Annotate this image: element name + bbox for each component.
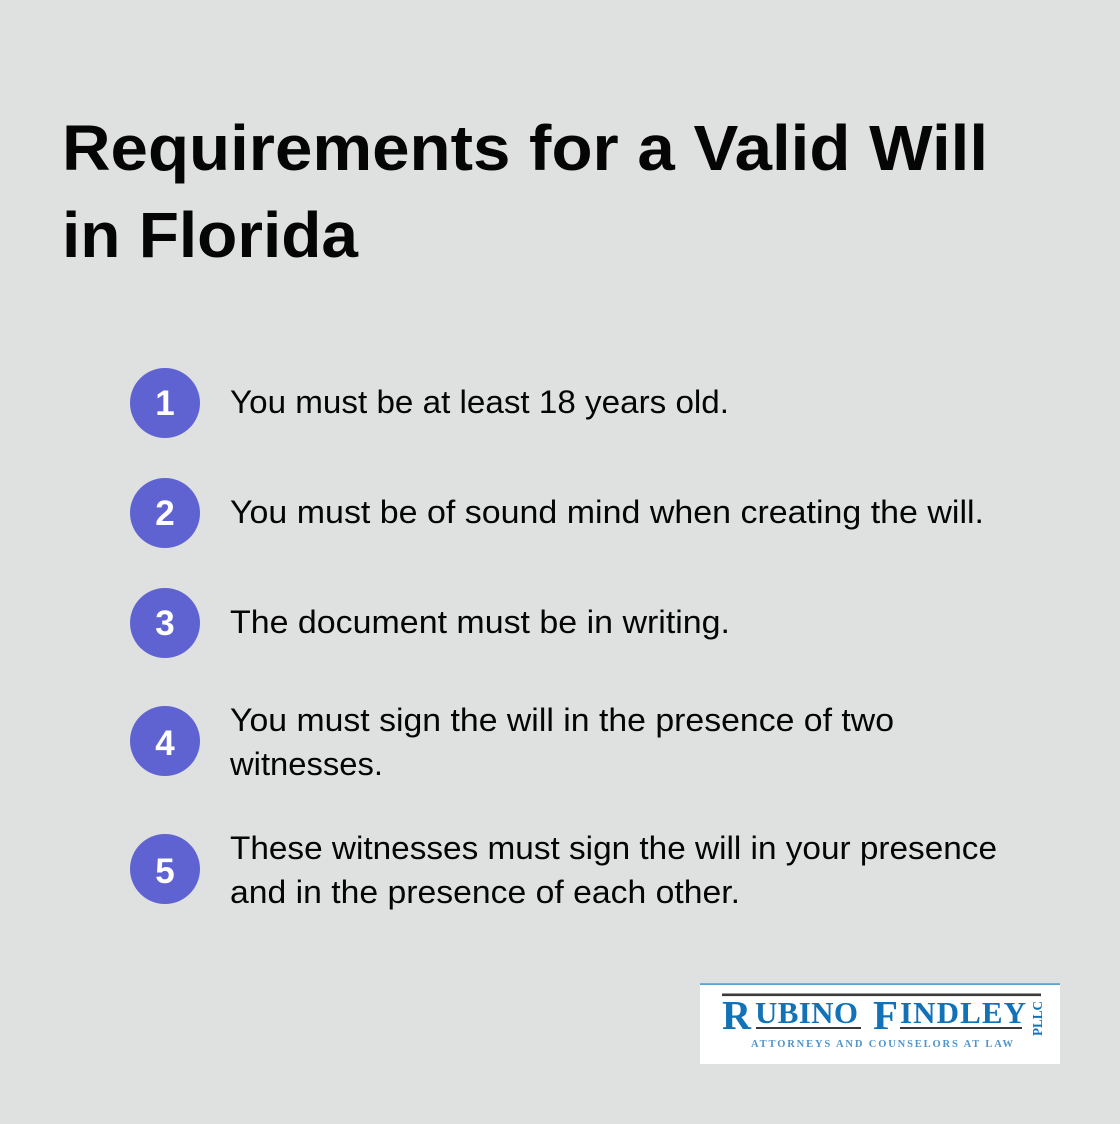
item 1 text: You must be at least 18 years old. [230,384,729,420]
list item 1 [130,368,729,438]
list item 4 [130,702,894,782]
number badge 3: 3 [155,604,175,643]
item 5 text: These witnesses must sign the will in your presence [230,830,997,866]
logo: Rubino Findley PLLC: ATTORNEYS AND COUNSELORS AT LAW [751,1039,1014,1050]
item 5 text [230,830,997,910]
item 2 text: You must be of sound mind when creating the will. [230,494,984,530]
logo: Rubino Findley PLLC: R [722,992,751,1038]
title [62,112,988,271]
item 4 text: You must sign the will in the presence of two [230,702,894,738]
item 3 text: The document must be in writing. [230,604,730,640]
number badge 5: 5 [155,852,175,891]
logo: Rubino Findley PLLC [700,984,1060,1064]
list item 5 [130,830,997,910]
number badge 4: 4 [155,724,175,763]
number badge 4 [130,706,200,776]
number badge 3 [130,588,200,658]
item 5 text: and in the presence of each other. [230,874,740,910]
logo: Rubino Findley PLLC: UBINO [755,995,858,1030]
list item 3 [130,588,730,658]
item 4 text: witnesses. [229,746,383,782]
number badge 2: 2 [155,494,175,533]
item 4 text [229,702,894,782]
title: in Florida [62,199,358,271]
list item 2 [130,478,984,548]
logo: Rubino Findley PLLC: F [873,992,898,1038]
number badge 2 [130,478,200,548]
number badge 5 [130,834,200,904]
number badge 1 [130,368,200,438]
logo: Rubino Findley PLLC: INDLEY [900,995,1026,1030]
logo: Rubino Findley PLLC: PLLC [1031,1001,1046,1036]
number badge 1: 1 [155,384,175,423]
title: Requirements for a Valid Will [62,112,988,184]
